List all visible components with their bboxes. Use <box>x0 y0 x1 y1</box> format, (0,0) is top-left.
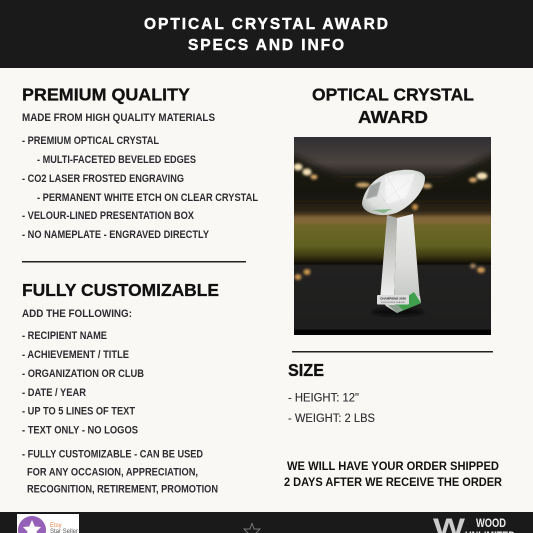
header title: SPECS AND INFO <box>188 37 344 54</box>
customization list: - ACHIEVEMENT / TITLE <box>22 349 129 361</box>
panel: premium quality <box>22 84 258 241</box>
customization list: - TEXT ONLY - NO LOGOS <box>22 424 138 436</box>
shipping note: WE WILL HAVE YOUR ORDER SHIPPED <box>287 459 499 473</box>
customization list <box>22 330 144 436</box>
product photo: crystal football trophy in stadium <box>284 137 501 335</box>
materials list <box>22 135 258 241</box>
subheading: materials: MADE FROM HIGH QUALITY MATERIALS <box>22 112 215 124</box>
heading: size: SIZE <box>288 360 324 380</box>
materials list: - CO2 LASER FROSTED ENGRAVING <box>22 173 184 185</box>
customization list: - DATE / YEAR <box>22 387 86 399</box>
shadow <box>372 308 424 316</box>
heading: fully customizable: FULLY CUSTOMIZABLE <box>22 280 219 300</box>
panel: fully customizable <box>22 280 219 496</box>
nameplate: EXCELLENCE LEAGUE <box>381 301 406 304</box>
icon: star outline <box>244 523 260 533</box>
header band <box>0 0 533 68</box>
stadium band <box>294 216 491 224</box>
wood logo: WOOD <box>476 516 506 530</box>
usage note: - FULLY CUSTOMIZABLE - CAN BE USED <box>22 448 203 460</box>
product title: AWARD <box>358 107 428 127</box>
header title <box>144 16 388 54</box>
footer band <box>0 512 533 533</box>
shipping note: 2 DAYS AFTER WE RECEIVE THE ORDER <box>284 475 502 489</box>
etsy star seller badge: Etsy <box>50 523 62 529</box>
wood logo <box>433 514 515 533</box>
size specs: - WEIGHT: 2 LBS <box>288 413 375 425</box>
nameplate <box>377 295 409 304</box>
materials list: - PREMIUM OPTICAL CRYSTAL <box>22 135 159 147</box>
materials list: - VELOUR-LINED PRESENTATION BOX <box>22 210 195 222</box>
usage note: FOR ANY OCCASION, APPRECIATION, <box>27 466 198 478</box>
trophy column <box>380 214 420 300</box>
usage note <box>22 448 218 496</box>
materials list: - PERMANENT WHITE ETCH ON CLEAR CRYSTAL <box>37 192 258 204</box>
materials list: - MULTI-FACETED BEVELED EDGES <box>37 154 196 166</box>
panel: size <box>288 360 375 425</box>
customization list: - ORGANIZATION OR CLUB <box>22 368 144 380</box>
size specs <box>288 392 375 425</box>
trophy base green <box>380 292 421 313</box>
customization list: - UP TO 5 LINES OF TEXT <box>22 406 135 418</box>
header title: OPTICAL CRYSTAL AWARD <box>144 16 388 33</box>
nameplate: CHAMPIONS 2026 <box>380 296 406 300</box>
shipping note <box>284 459 502 489</box>
product title: OPTICAL CRYSTAL <box>312 84 474 104</box>
heading: premium quality: PREMIUM QUALITY <box>22 84 190 104</box>
customization list: - RECIPIENT NAME <box>22 330 107 342</box>
product title <box>312 84 474 127</box>
subheading: add the following: ADD THE FOLLOWING: <box>22 308 132 320</box>
materials list: - NO NAMEPLATE - ENGRAVED DIRECTLY <box>22 229 210 241</box>
crystal football <box>362 170 425 215</box>
size specs: - HEIGHT: 12" <box>288 392 359 404</box>
usage note: RECOGNITION, RETIREMENT, PROMOTION <box>27 484 218 496</box>
stadium tiers <box>294 152 491 200</box>
etsy star seller badge <box>17 514 79 533</box>
stadium lights <box>294 164 488 280</box>
